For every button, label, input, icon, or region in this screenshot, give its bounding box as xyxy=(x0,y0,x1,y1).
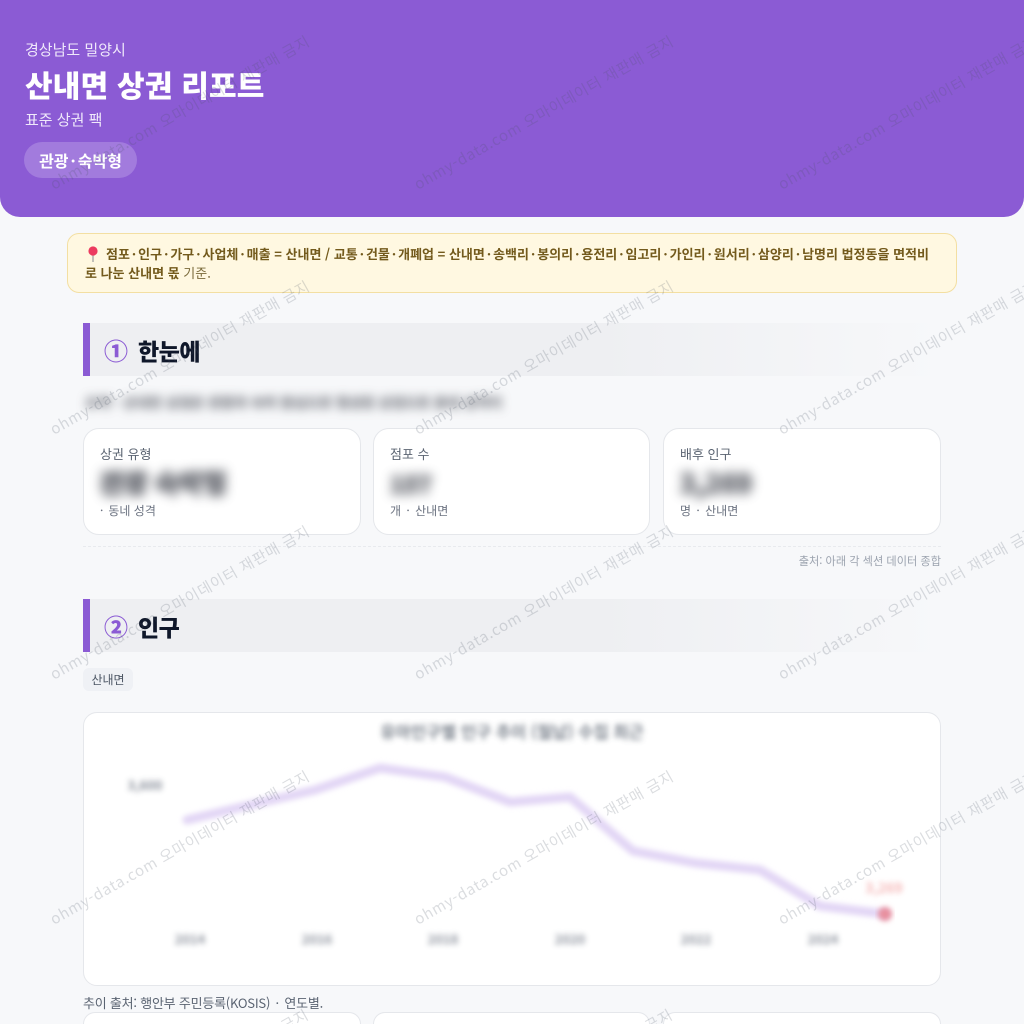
watermark overlay: ohmy-data.com 오마이데이터 재판매 금지 xyxy=(410,31,678,194)
trend line xyxy=(187,768,885,914)
note: · 동네 성격 xyxy=(100,502,156,519)
section number: ① xyxy=(104,332,128,367)
label: 배후 인구 xyxy=(680,444,731,463)
y axis label: 3,600 xyxy=(128,775,163,794)
lower card 3 xyxy=(663,1012,941,1024)
KPI card: 배후 인구 xyxy=(663,428,941,535)
icon: map pin xyxy=(88,246,98,262)
latest value label: 3,269 xyxy=(865,878,903,898)
subtitle: 표준 상권 팩 xyxy=(25,109,102,130)
x axis labels: 2020 xyxy=(555,929,586,948)
x axis labels xyxy=(175,929,839,948)
watermark overlay: ohmy-data.com 오마이데이터 재판매 금지 xyxy=(46,31,314,194)
notice text: 점포·인구·가구·사업체·매출 = 산내면 / 교통·건물·개폐업 = 산내면·송백리·봉의리·용전리·임고리·가인리·원서리·삼양리·남명리 법정동을 면적비 xyxy=(106,244,929,263)
watermark overlay: ohmy-data.com 오마이데이터 재판매 금지 xyxy=(410,521,678,684)
x axis labels: 2014 xyxy=(175,929,206,948)
chart card: population trend xyxy=(83,712,941,986)
badge: commercial type xyxy=(24,142,137,178)
chart source note: 추이 출처: 행안부 주민등록(KOSIS) · 연도별. xyxy=(83,993,323,1012)
header banner xyxy=(0,0,1024,217)
area tag xyxy=(83,668,133,691)
label: 점포 수 xyxy=(390,444,430,463)
blurred value: 157 xyxy=(390,466,432,500)
source note: 출처: 아래 각 섹션 데이터 종합 xyxy=(799,553,941,569)
title: 산내면 상권 리포트 xyxy=(25,62,265,106)
lower card 2 xyxy=(373,1012,650,1024)
chart title: 유아인구별 인구 추이 (월납) 수집 최근 xyxy=(380,719,644,743)
area tag: 산내면 xyxy=(91,671,125,688)
KPI card: 상권 유형 xyxy=(83,428,361,535)
watermark overlay: ohmy-data.com 오마이데이터 재판매 금지 xyxy=(410,766,678,929)
notice callout xyxy=(67,233,957,293)
label: 상권 유형 xyxy=(100,444,151,463)
watermark overlay: ohmy-data.com 오마이데이터 재판매 금지 xyxy=(46,766,314,929)
x axis labels: 2024 xyxy=(808,929,839,948)
latest value marker xyxy=(878,907,892,921)
section title: 한눈에 xyxy=(138,333,200,367)
KPI card: 점포 수 xyxy=(373,428,650,535)
note: 명 · 산내면 xyxy=(680,502,738,519)
x axis labels: 2016 xyxy=(302,929,333,948)
badge: commercial type: 관광·숙박형 xyxy=(39,148,122,172)
watermark overlay: ohmy-data.com 오마이데이터 재판매 금지 xyxy=(46,276,314,439)
blurred value: 3,269 xyxy=(680,464,753,501)
section title: 인구 xyxy=(138,609,179,643)
watermark overlay: ohmy-data.com 오마이데이터 재판매 금지 xyxy=(46,521,314,684)
region label: 경상남도 밀양시 xyxy=(25,39,126,60)
x axis labels: 2018 xyxy=(428,929,459,948)
blurred value: 관광 숙박형 xyxy=(100,464,227,501)
section heading: 인구 xyxy=(83,599,941,652)
x axis labels: 2022 xyxy=(681,929,711,948)
notice text: 로 나눈 산내면 몫 기준. xyxy=(85,263,211,282)
note: 개 · 산내면 xyxy=(390,502,448,519)
section number: ② xyxy=(104,608,128,643)
notice text xyxy=(85,244,929,282)
section heading: 한눈에 xyxy=(83,323,941,376)
lower card 1 xyxy=(83,1012,361,1024)
watermark overlay: ohmy-data.com 오마이데이터 재판매 금지 xyxy=(410,276,678,439)
